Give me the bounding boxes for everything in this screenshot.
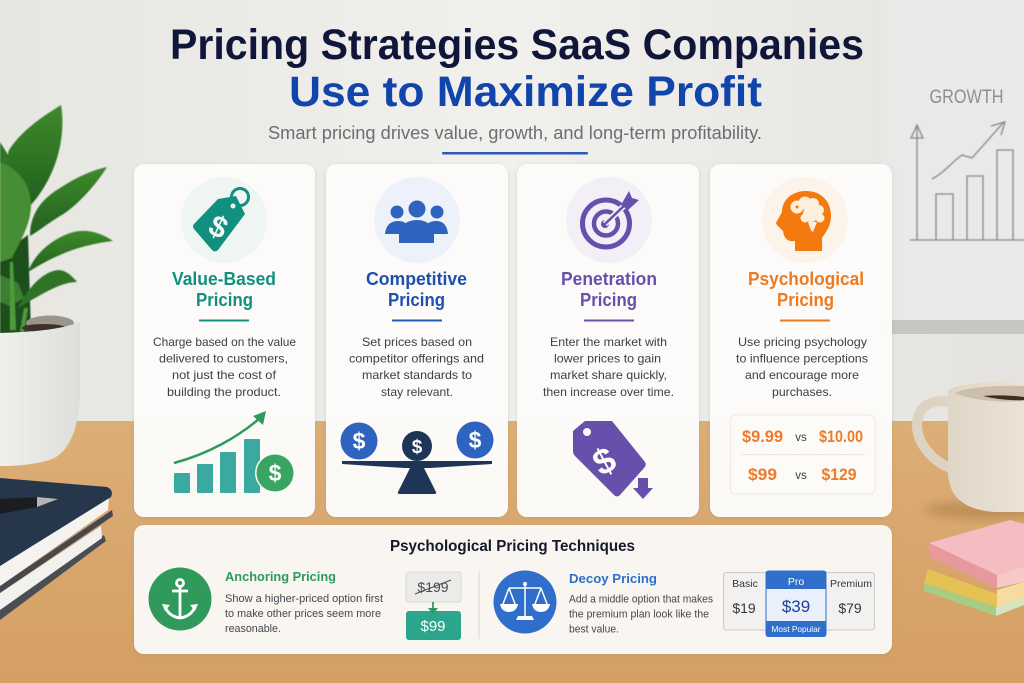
panel: psychological pricing (710, 164, 892, 517)
background: office wall (0, 0, 1024, 422)
pricing tiers comparison: $79 (838, 600, 862, 616)
icon: balance scales (494, 570, 556, 634)
coffee mug (917, 381, 1024, 519)
icon: target with arrow (566, 177, 652, 263)
panel: value-based pricing (134, 164, 315, 517)
notebook with pen (0, 478, 113, 620)
price comparison box: $129 (822, 466, 856, 484)
title underline (442, 152, 588, 154)
anchoring price example: $199 (417, 579, 449, 595)
subtitle: Smart pricing drives value, growth, and long-term profitability. (268, 123, 762, 143)
technique: decoy pricing (569, 571, 713, 636)
technique: anchoring pricing: to make other prices seem more (225, 608, 381, 620)
description: psychological: and encourage more (745, 368, 859, 382)
description: psychological: Use pricing psychology (738, 335, 867, 349)
panel: psychological pricing techniques (134, 525, 892, 654)
icon: balance scale with dollar coins: $ (353, 428, 366, 454)
price comparison box (730, 415, 875, 494)
icon: balance scale with dollar coins: $ (412, 437, 423, 458)
icon: price tag with down arrow: $ (586, 438, 623, 484)
icon: anchor (148, 568, 212, 630)
description: value-based: Charge based on the value (153, 335, 296, 349)
icon: head with brain (762, 177, 848, 263)
technique: decoy pricing: Decoy Pricing (569, 571, 657, 586)
description: value-based: not just the cost of (172, 368, 277, 382)
title: Pricing Strategies SaaS Companies (170, 21, 864, 69)
price comparison box: vs (795, 470, 807, 482)
price comparison box: $9.99 (742, 428, 783, 446)
heading: psychological: Pricing (777, 290, 834, 310)
description: penetration: market share quickly, (550, 368, 667, 382)
title: Use to Maximize Profit (289, 68, 762, 116)
anchoring price example: $99 (420, 618, 446, 635)
price comparison box: $99 (748, 466, 777, 484)
icon: price tag (181, 177, 267, 263)
technique: anchoring pricing (225, 569, 383, 635)
price comparison box: $10.00 (819, 428, 863, 446)
pricing tiers comparison: Basic (732, 578, 758, 590)
heading: competitive: Competitive (366, 269, 467, 289)
pricing tiers comparison: Most Popular (772, 624, 821, 634)
icon: price tag: $ (203, 209, 233, 246)
description: penetration: Enter the market with (550, 335, 667, 349)
anchoring price example (406, 572, 461, 640)
description: value-based: delivered to customers, (159, 352, 288, 366)
chart: rising bars with dollar coin (174, 411, 295, 493)
heading: penetration: Penetration (561, 269, 657, 289)
whiteboard with growth sketch (881, 0, 1024, 334)
price comparison box: vs (795, 432, 807, 444)
technique: anchoring pricing: Show a higher-priced option first (225, 593, 383, 605)
heading: competitive: Pricing (388, 290, 445, 310)
icon: balance scale with dollar coins: $ (469, 427, 482, 453)
whiteboard with growth sketch: GROWTH (930, 87, 1004, 108)
pricing tiers comparison (724, 570, 874, 637)
panel: penetration pricing (517, 164, 699, 517)
title (170, 21, 864, 116)
icon: price tag with down arrow (573, 421, 653, 499)
pricing tiers comparison: Pro (788, 576, 804, 588)
icon: balance scale with dollar coins (340, 422, 494, 494)
pricing tiers comparison: $19 (732, 600, 756, 616)
description: psychological: to influence perceptions (736, 352, 868, 366)
heading: penetration: Pricing (580, 290, 637, 310)
potted plant (0, 105, 113, 466)
heading: value-based: Value-Based (172, 269, 276, 289)
pricing tiers comparison: Premium (830, 578, 872, 590)
icon: group of people (374, 177, 460, 263)
description: competitive: Set prices based on (362, 335, 472, 349)
pricing tiers comparison: $39 (782, 597, 810, 616)
panel heading: Psychological Pricing Techniques (390, 538, 635, 555)
description: value-based: building the product. (167, 385, 281, 399)
heading: psychological: Psychological (748, 269, 864, 289)
description: competitive: stay relevant. (381, 385, 453, 399)
heading: value-based: Pricing (196, 290, 253, 310)
technique: decoy pricing: Add a middle option that makes (569, 594, 713, 606)
technique: decoy pricing: best value. (569, 624, 619, 636)
sticky notes stack (924, 520, 1024, 616)
background: wooden desk (0, 421, 1024, 683)
technique: decoy pricing: the premium plan look like the (569, 608, 709, 620)
description: competitive: market standards to (362, 368, 472, 382)
description: penetration: then increase over time. (543, 385, 674, 399)
description: penetration: lower prices to gain (554, 352, 661, 366)
technique: anchoring pricing: reasonable. (225, 623, 281, 635)
technique: anchoring pricing: Anchoring Pricing (225, 569, 336, 584)
panel: competitive pricing (326, 164, 508, 517)
chart: rising bars with dollar coin: $ (269, 460, 282, 486)
description: competitive: competitor offerings and (349, 352, 484, 366)
description: psychological: purchases. (772, 385, 832, 399)
